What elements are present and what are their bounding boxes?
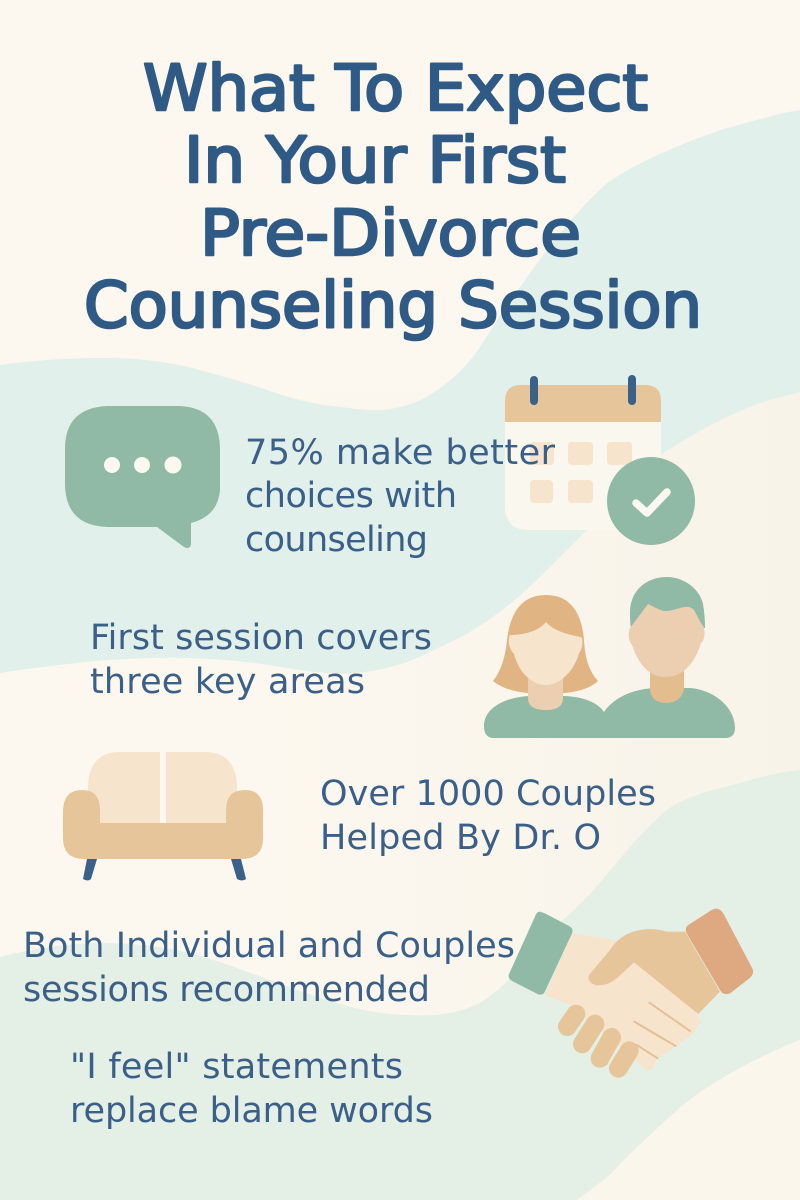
text: couples helped: Over 1000 Couples <box>320 774 656 814</box>
woman neck <box>528 670 563 710</box>
text: first session: First session covers <box>90 618 432 658</box>
title: Pre-Divorce <box>200 197 581 270</box>
icon: handshake <box>509 909 753 1070</box>
icon: sofa <box>63 752 263 880</box>
text: first session <box>90 618 432 702</box>
title: In Your First <box>184 124 566 197</box>
woman hair <box>493 595 598 694</box>
icon: couple <box>484 577 735 738</box>
woman face <box>509 622 582 685</box>
text: I feel statements: "I feel" statements <box>70 1047 403 1087</box>
text: I feel statements: replace blame words <box>70 1091 433 1131</box>
title <box>84 52 702 342</box>
icon: chat bubble <box>65 406 220 548</box>
man hair <box>630 577 705 628</box>
man face <box>629 604 704 677</box>
text: 75% statistic: choices with <box>245 476 457 516</box>
text: 75% statistic: counseling <box>245 520 428 560</box>
text: sessions recommended <box>23 926 515 1010</box>
text: 75% statistic <box>245 433 556 560</box>
icon: calendar with check <box>505 375 695 545</box>
text: 75% statistic: 75% make better <box>245 433 556 473</box>
text: first session: three key areas <box>90 662 365 702</box>
man neck <box>650 665 684 703</box>
text: sessions recommended: Both Individual and Couples <box>23 926 515 966</box>
title: What To Expect <box>143 52 648 125</box>
text: couples helped: Helped By Dr. O <box>320 818 601 858</box>
text: sessions recommended: sessions recommended <box>23 970 430 1010</box>
shoulders <box>484 688 735 738</box>
title: Counseling Session <box>84 269 702 342</box>
text: I feel statements <box>70 1047 433 1131</box>
text: couples helped <box>320 774 656 858</box>
